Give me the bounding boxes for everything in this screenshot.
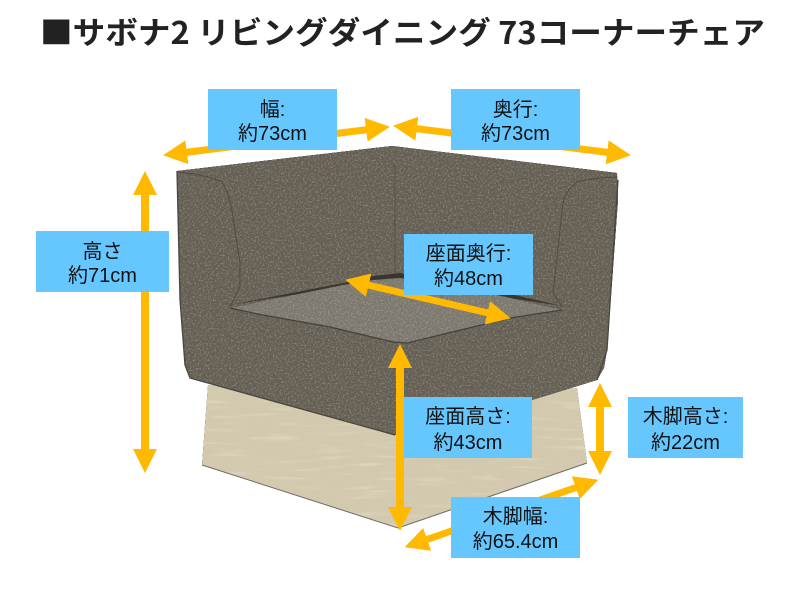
label: width (208, 89, 337, 150)
label: seat height: 座面高さ: (425, 405, 511, 428)
arm seams (177, 172, 617, 307)
label: depth: 奥行: (493, 98, 538, 121)
label: width: 幅: (260, 98, 285, 121)
arrow: wood leg height (596, 393, 604, 465)
arrow: total height (141, 181, 149, 463)
seat cushion (230, 278, 562, 343)
arrow: wood leg width (414, 483, 589, 544)
label: width: 約73cm (238, 122, 307, 145)
title: ■サボナ2 リビングダイニング 73コーナーチェア (40, 8, 765, 53)
upholstered body (177, 146, 618, 435)
label: wood leg width: 約65.4cm (473, 530, 558, 553)
label: wood leg width (451, 497, 580, 558)
wooden base (202, 385, 587, 528)
label: depth (451, 89, 580, 150)
label: seat height (404, 397, 532, 458)
label: seat depth (404, 234, 533, 295)
label: height: 約71cm (68, 264, 137, 287)
label: seat height: 約43cm (434, 431, 502, 454)
arrow: seat depth (355, 282, 501, 316)
label: depth: 約73cm (481, 122, 550, 145)
arrow: seat height (396, 354, 404, 521)
label: seat depth: 約48cm (434, 267, 503, 290)
arrow: total width (173, 128, 380, 154)
label: height: 高さ (82, 240, 122, 263)
seat shadow (230, 273, 562, 306)
label: seat depth: 座面奥行: (426, 242, 511, 265)
label: wood leg height (628, 397, 743, 458)
corner chair illustration (177, 146, 618, 528)
label: wood leg height: 約22cm (651, 431, 720, 454)
arrow: total depth (403, 127, 621, 154)
label: wood leg height: 木脚高さ: (643, 405, 728, 428)
label: wood leg width: 木脚幅: (483, 505, 548, 528)
label: height (36, 231, 169, 292)
